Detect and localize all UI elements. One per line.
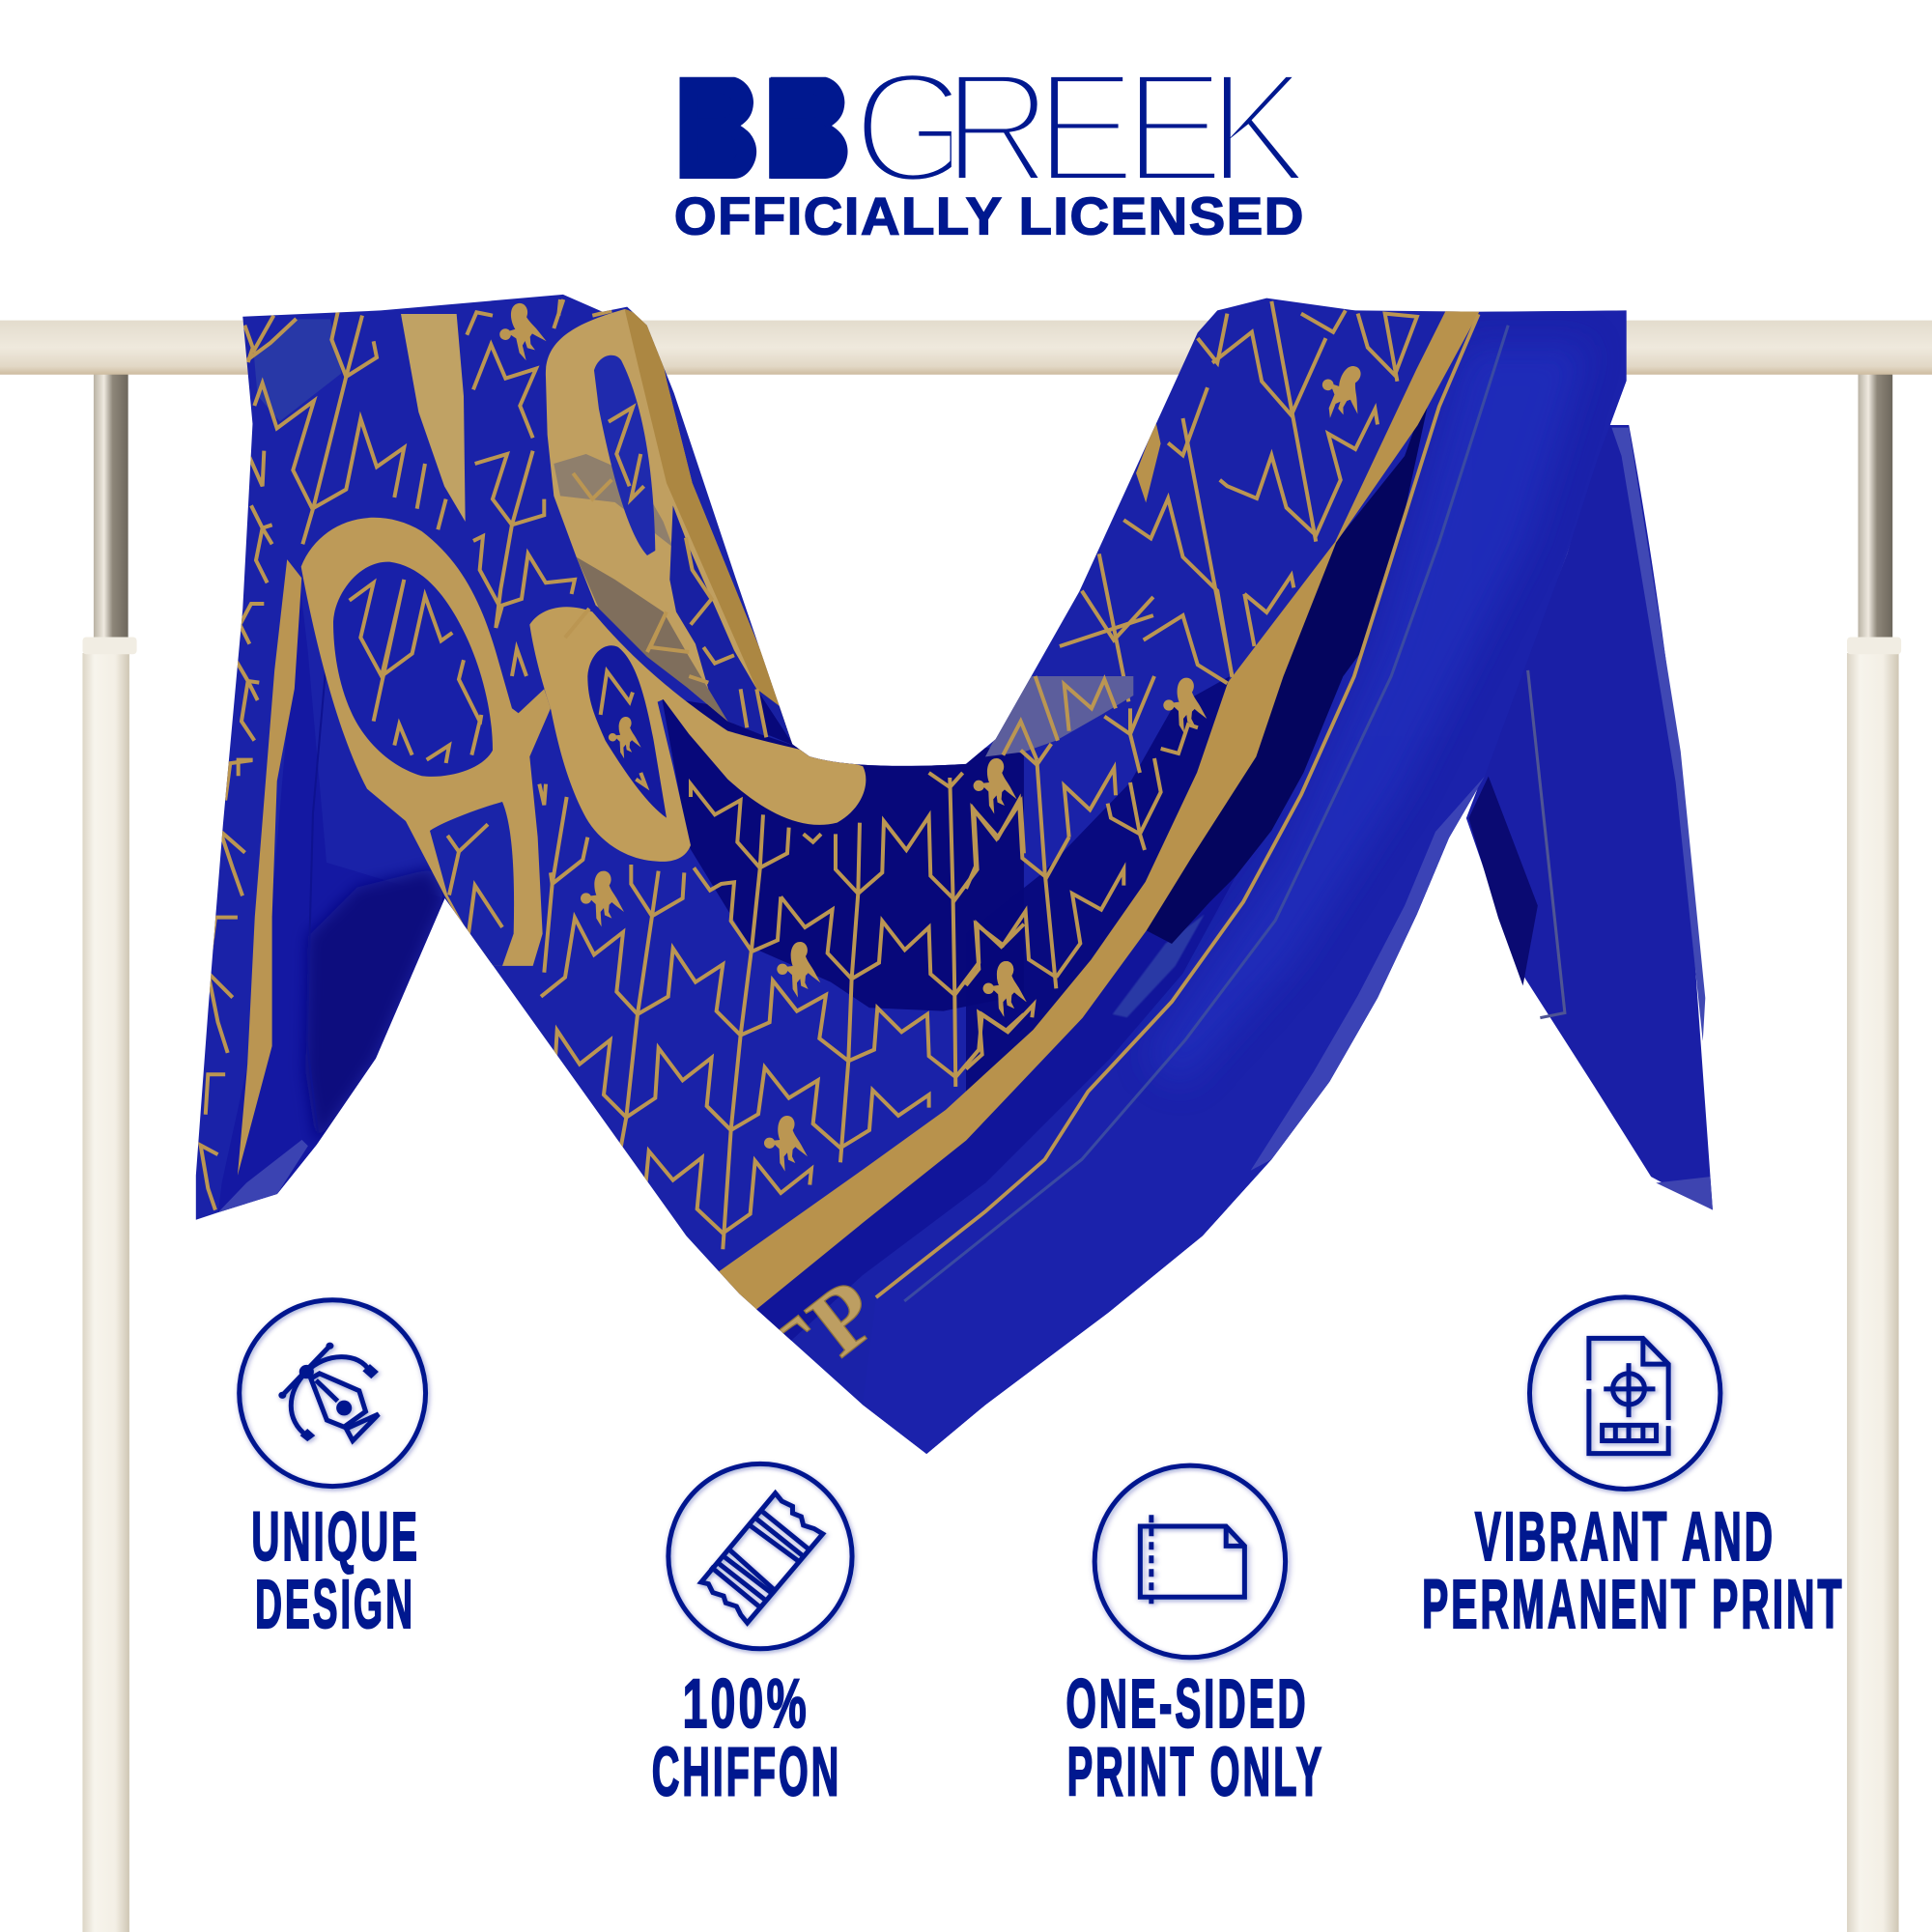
right post metal — [1858, 370, 1892, 643]
logo — [671, 39, 1309, 245]
arrows upper right — [1060, 301, 1417, 701]
arrows middle — [447, 538, 766, 934]
officially licensed line: OFFICIALLY LICENSED — [674, 185, 1305, 245]
horizontal rail — [0, 321, 1932, 375]
label: one-sided print only: PRINT ONLY — [1067, 1733, 1324, 1810]
left post — [82, 653, 129, 1932]
scarf silhouette — [196, 295, 1627, 1454]
poodle upper right — [1311, 356, 1376, 428]
gold strip on left fold — [238, 559, 301, 1176]
left collar — [82, 637, 137, 654]
upper gold curl — [546, 309, 794, 746]
lower corner lettering: ΓP — [743, 1260, 897, 1411]
tan shadow patch — [554, 454, 673, 548]
scarf body artwork — [201, 299, 1627, 1454]
feature: vibrant print — [1422, 1297, 1844, 1643]
icon: folded scarf — [668, 1463, 852, 1649]
feature: 100% chiffon — [652, 1463, 852, 1810]
arrows right of centre — [966, 676, 1207, 1069]
see-through patch — [985, 676, 1133, 756]
loop lower hole — [430, 802, 514, 966]
gold stem upper — [401, 314, 466, 522]
upper teardrop hole — [594, 355, 655, 555]
second teardrop hole — [587, 645, 667, 818]
feature: one-sided print — [1065, 1465, 1324, 1810]
scarf — [196, 295, 1713, 1454]
feature: unique design — [240, 1300, 426, 1643]
icon: page with fold line — [1094, 1465, 1286, 1658]
arrows lower left strip — [201, 760, 252, 1210]
poodles central — [581, 758, 1027, 1172]
arrows upper left — [237, 299, 644, 776]
label: unique design: UNIQUE — [251, 1498, 420, 1576]
label: 100% chiffon: 100% — [683, 1665, 810, 1743]
thin gold line — [876, 314, 1479, 1297]
translucent hem — [1251, 777, 1485, 1171]
label: unique design: DESIGN — [255, 1566, 415, 1643]
second gold lobe — [529, 607, 866, 862]
label: vibrant and permanent print — [1422, 1498, 1844, 1643]
poodle in teardrop — [609, 717, 641, 758]
logo word GREEK: GREEK — [853, 39, 1309, 215]
label: unique design — [251, 1498, 420, 1643]
right collar — [1847, 637, 1901, 654]
central dark shading — [662, 697, 1024, 1011]
label: 100% chiffon: CHIFFON — [652, 1733, 841, 1810]
left post metal — [94, 370, 128, 643]
pale patch by gold band — [1113, 915, 1205, 1017]
loop inner oval — [333, 562, 493, 777]
gold figure: coordinates follow the middle crop — [301, 309, 866, 966]
left hanging dark fold — [218, 559, 444, 1212]
large gold loop — [301, 518, 551, 966]
faint blue line — [904, 326, 1508, 1301]
label: one-sided print only — [1065, 1665, 1324, 1810]
gold border band — [715, 310, 1479, 1314]
icon: pen tool — [240, 1300, 426, 1487]
right post — [1847, 653, 1899, 1932]
blue arrow region — [669, 505, 794, 746]
stripe below gold band — [751, 876, 1236, 1343]
navy shadow strip — [1146, 370, 1435, 944]
arrows central pattern — [541, 773, 1024, 1249]
logo mark BB: BB — [671, 47, 850, 211]
main plain band — [863, 310, 1627, 1454]
pale top-left patch — [254, 319, 341, 421]
poodle motif top — [499, 303, 547, 360]
dark shading next to gold band — [966, 676, 1230, 1094]
dark arrow tip — [759, 694, 794, 746]
gold patch on neck — [1136, 421, 1161, 502]
label: 100% chiffon — [652, 1665, 841, 1810]
label: one-sided print only: ONE-SIDED — [1065, 1665, 1309, 1743]
band highlight — [1146, 345, 1589, 1084]
brown shadow on curl — [577, 557, 727, 722]
icon: print file with target — [1529, 1297, 1720, 1489]
gold outer edge — [625, 309, 794, 746]
right hanging flap — [1466, 425, 1713, 1210]
